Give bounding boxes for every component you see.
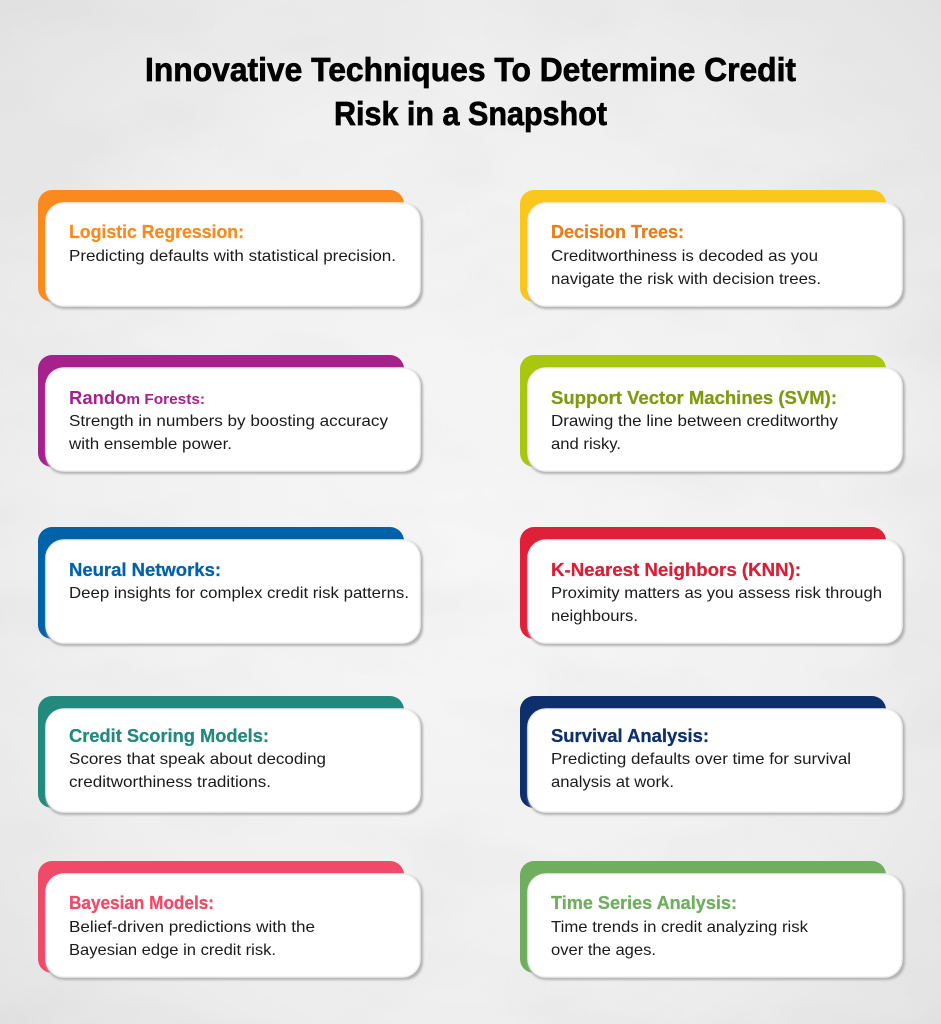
panel: Random Forests: Random Forests: [69, 388, 205, 408]
panel: Credit Scoring Models: Scores that speak about decoding [69, 751, 326, 768]
panel: Bayesian Models: Belief-driven predictions with the [69, 919, 315, 936]
panel: Bayesian Models: Bayesian edge in credit risk. [69, 942, 276, 959]
panel: Decision Trees [520, 190, 905, 309]
panel: Decision Trees: navigate the risk with decision trees. [551, 271, 821, 288]
panel: Survival Analysis [520, 696, 905, 815]
panel: Neural Networks: Neural Networks: [69, 560, 221, 580]
panel: Random Forests [38, 355, 423, 474]
title [145, 51, 796, 132]
panel: Support Vector Machines: and risky. [551, 436, 621, 453]
panel: Survival Analysis: Predicting defaults over time for survival [551, 751, 851, 768]
panel: K-Nearest Neighbors: K-Nearest Neighbors (KNN): [551, 560, 801, 580]
panel: Bayesian Models: Bayesian Models: [69, 893, 214, 913]
title: Innovative Techniques To Determine Credit [145, 51, 796, 88]
panel: Support Vector Machines: Support Vector Machines (SVM): [551, 388, 837, 408]
panel: Decision Trees: Decision Trees: [551, 222, 684, 242]
panel: Neural Networks [38, 527, 423, 646]
title: Risk in a Snapshot [334, 95, 607, 132]
panel: Time Series Analysis: over the ages. [551, 942, 656, 959]
panel: Survival Analysis: analysis at work. [551, 774, 674, 791]
panel: Survival Analysis: Survival Analysis: [551, 726, 709, 746]
panel: K-Nearest Neighbors: neighbours. [551, 608, 638, 625]
panel: Decision Trees: Creditworthiness is decoded as you [551, 248, 818, 265]
panel: Logistic Regression: Predicting defaults with statistical precision. [69, 248, 396, 265]
panel: K-Nearest Neighbors: Proximity matters as you assess risk through [551, 585, 882, 602]
panel: Credit Scoring Models [38, 696, 423, 815]
panel: K-Nearest Neighbors [520, 527, 905, 646]
panel: Logistic Regression [38, 190, 423, 309]
panel: Random Forests: with ensemble power. [68, 436, 232, 453]
panel: Neural Networks: Deep insights for complex credit risk patterns. [69, 585, 409, 602]
panel: Logistic Regression: Logistic Regression: [69, 222, 244, 242]
panel: Credit Scoring Models: creditworthiness traditions. [69, 774, 271, 791]
panel: Random Forests: Strength in numbers by boosting accuracy [69, 413, 388, 430]
panel: Credit Scoring Models: Credit Scoring Models: [69, 726, 269, 746]
panel: Bayesian Models [38, 861, 423, 980]
panel: Time Series Analysis: Time Series Analysis: [551, 893, 737, 913]
panel: Time Series Analysis [520, 861, 905, 980]
panel: Support Vector Machines [520, 355, 905, 474]
panel: Time Series Analysis: Time trends in credit analyzing risk [551, 919, 809, 936]
panel: Support Vector Machines: Drawing the line between creditworthy [551, 413, 838, 430]
